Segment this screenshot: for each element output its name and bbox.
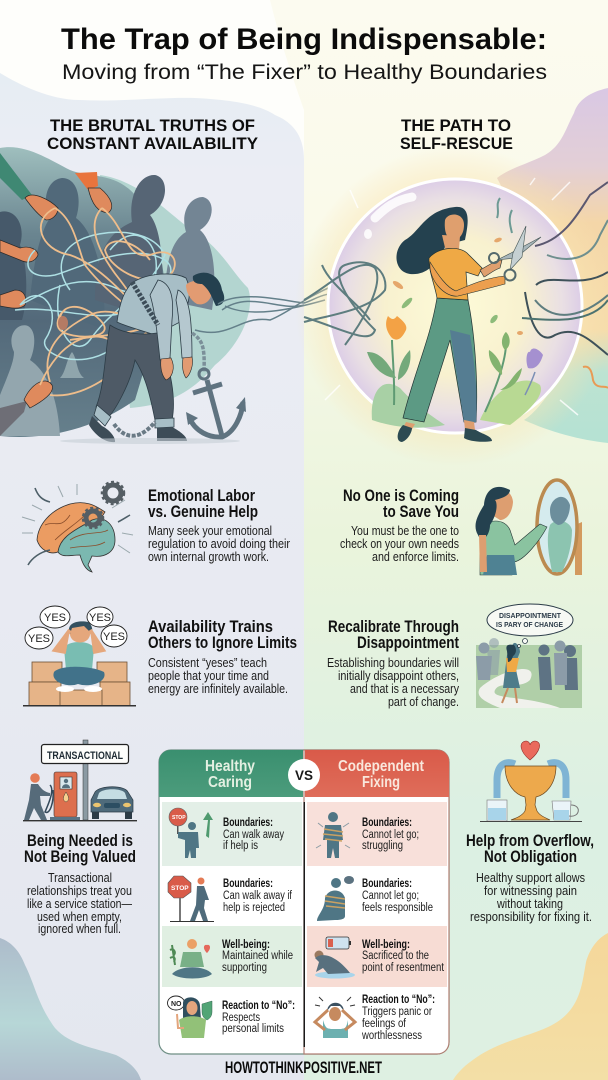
text: no one is coming: to Save You: [383, 503, 459, 521]
illustration: woman cutting strings inside bubble: [295, 146, 608, 466]
title: The Trap of Being Indispensable:: [61, 23, 547, 56]
heading: path to self-rescue: SELF-RESCUE: [400, 134, 513, 153]
text: being needed: [24, 832, 136, 936]
text: emotional labor: Many seek your emotional: [148, 523, 272, 538]
row 1 left: Can walk away: [223, 829, 284, 841]
text: recalibrate: part of change.: [388, 694, 459, 709]
icon: brain with gears: [22, 482, 133, 572]
heading: brutal truths: THE BRUTAL TRUTHS OF: [50, 116, 255, 135]
icon: overflowing goblet: [480, 741, 582, 822]
icon: stressed person saying yes among boxes: YES: [44, 612, 66, 624]
text: recalibrate: [327, 618, 459, 709]
text: no one is coming: and enforce limits.: [372, 549, 459, 564]
title: Moving from “The Fixer” to Healthy Boundaries: [62, 60, 547, 84]
table header: codependent fixing: Fixing: [362, 774, 400, 791]
text: being needed: relationships treat you: [27, 883, 132, 898]
text: help from overflow: responsibility for fixing it.: [470, 909, 592, 924]
title: [61, 23, 547, 84]
text: being needed: Not Being Valued: [24, 848, 136, 866]
heading: path to self-rescue: THE PATH TO: [401, 116, 511, 135]
text: help from overflow: [466, 832, 594, 924]
row 4 right: [315, 994, 435, 1042]
text: availability trains: Others to Ignore Limits: [148, 634, 297, 652]
row 3 right: point of resentment: [362, 962, 445, 974]
row 4 left: Reaction to “No”:: [222, 1000, 295, 1012]
icon: disappointment scene: IS PARY OF CHANGE: [496, 620, 563, 629]
icon: stressed person saying yes among boxes: YES: [89, 612, 111, 624]
table header: healthy caring: Caring: [208, 774, 252, 791]
row 1 right: Cannot let go;: [362, 829, 419, 841]
row 4 left: NO: [171, 1001, 182, 1008]
row 1 left: if help is: [223, 840, 258, 852]
row 4 right: feelings of: [362, 1018, 407, 1030]
text: availability trains: Availability Trains: [148, 618, 273, 636]
vs badge: VS: [295, 767, 313, 783]
row 4 right: Triggers panic or: [362, 1006, 432, 1018]
footer: website: HOWTOTHINKPOSITIVE.NET: [225, 1058, 382, 1077]
icon: transactional service station: TRANSACTIONAL: [47, 750, 123, 762]
text: no one is coming: [340, 487, 459, 564]
text: availability trains: energy are infinitely available.: [148, 681, 288, 696]
text: recalibrate: initially disappoint others,: [338, 668, 459, 683]
text: emotional labor: Emotional Labor: [148, 487, 255, 505]
row 1 right: Boundaries:: [362, 817, 412, 829]
row 4 right: Reaction to “No”:: [362, 994, 435, 1006]
text: availability trains: Consistent “yeses” teach: [148, 655, 267, 670]
text: help from overflow: without taking: [496, 896, 563, 911]
comparison table: [159, 750, 449, 1054]
text: emotional labor: [148, 487, 291, 564]
text: emotional labor: vs. Genuine Help: [148, 503, 258, 521]
text: help from overflow: Healthy support allows: [476, 870, 585, 885]
illustration: man tangled by demands: [0, 147, 345, 444]
table header: healthy caring: [159, 750, 303, 797]
row 2 right: Boundaries:: [362, 878, 412, 890]
row 3 right: [314, 937, 445, 978]
text: help from overflow: Not Obligation: [484, 848, 577, 866]
row 2 right: [317, 876, 433, 921]
row 1 right: struggling: [362, 840, 403, 852]
text: availability trains: people that your time and: [148, 668, 269, 683]
text: being needed: like a service station—: [27, 896, 132, 911]
row 2 left: Can walk away if: [223, 890, 293, 902]
text: emotional labor: own internal growth work.: [148, 549, 269, 564]
icon: stressed person saying yes among boxes: YES: [28, 633, 50, 645]
text: availability trains: [148, 618, 297, 696]
text: help from overflow: for witnessing pain: [484, 883, 577, 898]
table header: healthy caring: Healthy: [205, 758, 255, 775]
row 2 left: Boundaries:: [223, 878, 273, 890]
row 1 left: Boundaries:: [223, 817, 273, 829]
vs badge: [288, 759, 320, 791]
text: emotional labor: regulation to avoid doing their: [148, 536, 291, 551]
text: no one is coming: check on your own needs: [340, 536, 459, 551]
row 2 right: Cannot let go;: [362, 890, 419, 902]
heading: brutal truths: [47, 116, 259, 153]
icon: transactional service station: [23, 740, 137, 821]
text: recalibrate: Disappointment: [357, 634, 459, 652]
row 3 left: Maintained while: [222, 950, 293, 962]
row 2 left: STOP: [171, 885, 189, 892]
heading: brutal truths: CONSTANT AVAILABILITY: [47, 134, 259, 153]
icon: stressed person saying yes among boxes: YES: [103, 631, 125, 643]
row 2 left: help is rejected: [223, 902, 285, 914]
text: no one is coming: You must be the one to: [351, 523, 459, 538]
text: recalibrate: Recalibrate Through: [328, 618, 459, 636]
row 1 left: [169, 808, 284, 858]
heading: path to self-rescue: [400, 116, 513, 153]
text: no one is coming: No One is Coming: [343, 487, 459, 505]
row 1 right: [316, 812, 419, 858]
row 3 right: Sacrificed to the: [362, 950, 429, 962]
icon: stressed person saying yes among boxes: [23, 606, 136, 706]
row 4 left: personal limits: [222, 1023, 284, 1035]
row 4 left: [168, 996, 295, 1038]
row 4 right: worthlessness: [361, 1030, 422, 1042]
row 2 left: [168, 876, 293, 922]
text: being needed: used when empty,: [37, 909, 122, 924]
table header: codependent fixing: [305, 750, 449, 797]
text: recalibrate: Establishing boundaries will: [327, 655, 459, 670]
row 3 left: [170, 939, 293, 978]
row 4 left: Respects: [222, 1012, 260, 1024]
text: being needed: ignored when full.: [38, 921, 121, 936]
icon: woman at mirror: [476, 480, 582, 575]
row 3 left: Well-being:: [222, 939, 270, 951]
text: being needed: Being Needed is: [27, 832, 133, 850]
icon: disappointment scene: [476, 604, 582, 708]
icon: disappointment scene: DISAPPOINTMENT: [499, 611, 561, 620]
row 3 right: Well-being:: [362, 939, 410, 951]
text: recalibrate: and that is a necessary: [350, 681, 459, 696]
row 3 left: supporting: [222, 962, 267, 974]
table header: codependent fixing: Codependent: [338, 758, 425, 775]
text: being needed: Transactional: [48, 870, 112, 885]
row 2 right: feels responsible: [362, 902, 433, 914]
row 1 left: STOP: [172, 815, 186, 821]
